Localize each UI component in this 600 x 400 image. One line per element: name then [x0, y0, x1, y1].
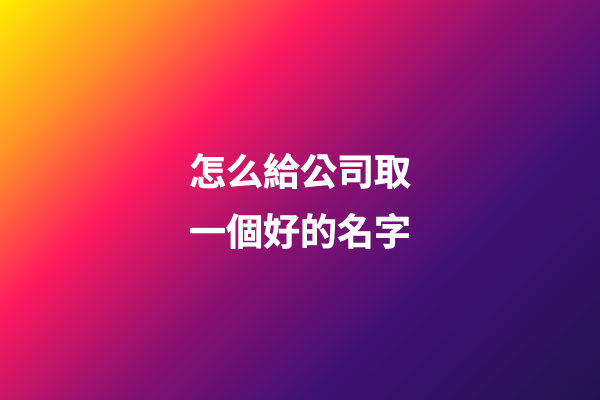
title	[189, 152, 411, 253]
title: 怎么給公司取	[189, 152, 411, 193]
title: 一個好的名字	[189, 212, 411, 253]
